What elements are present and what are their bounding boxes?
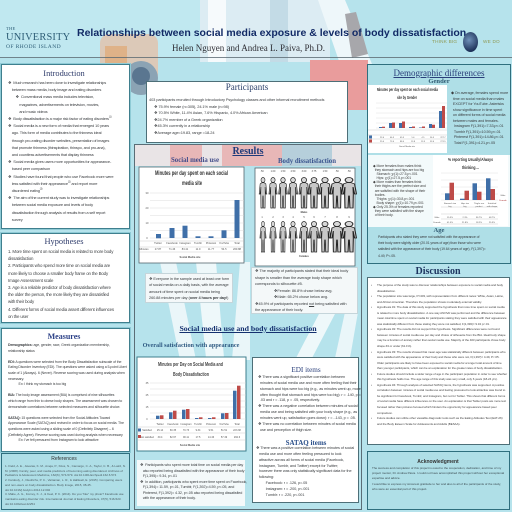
text: measures description: Appearance Scale (SATAQ) and revised in order to focus on social media. The (8, 421, 124, 425)
callout: body dissatisfaction findings: the appearance of their body. (255, 307, 303, 312)
bar chart: minutes per day by gender: 13.8 (411, 141, 416, 143)
callout: body dissatisfaction findings: ❖45.9% of participants reported not being satisfied with (255, 300, 346, 306)
bar chart: minutes per day by body dissatisfaction: 9.51 (209, 429, 214, 432)
text: EDI findings: .03 and r = .118, p = .05, respectively. (260, 398, 320, 402)
text: references list: 2. Fardouly, J., Diedrichs, P. C., Vartanian, L. R., & Halliwell, E. (2015). Comparing users and non-users on body dissatisfaction. Body Image, 2015, 38-45. doi:10.1016/j.bodyim.2014.12.002 (5, 478, 122, 492)
text: discussion bullets: Future studies can utilize other viewable diagnostic tools such as the Eating Attitudes Test (EAT-26) and the Body Esteem Scale for Adolescents and Adults (BESAA). (377, 416, 503, 426)
text: participant demographics: 403 participants recruited through Introductory Psychology classes and other informal recruitment methods (149, 97, 324, 102)
text: acknowledgment: The success and completion of this project is owed to the cooperation, dedication, and time of my project mentor, Dr. Andrea Paiva. I could not have accomplished this project without her exceptional expertise and advice. (372, 466, 504, 480)
text: body part findings: ◆ Only 25.3% of females reported (373, 205, 423, 209)
callout: social media use and dissatisfaction findings: with the appearance of their body. (143, 496, 196, 500)
text: SATAQ findings: Instagram, Tumblr, and Twitter) except for Twitter; (259, 464, 338, 468)
text: introduction bullets: through pro-eating disorder websites, presentation of images (12, 138, 109, 143)
bar chart: minutes per day by body dissatisfaction: 17.5 (196, 436, 201, 439)
heading: body dissatisfaction: Body dissatisfaction (278, 158, 336, 165)
text: age findings: their body were slightly older (20.01 years of age) than those who were (378, 241, 481, 245)
text: introduction bullets: between social media exposure and levels of body (12, 202, 93, 207)
text: SATAQ findings: Facebook: r = .126, p=.05 (266, 481, 307, 485)
heading: overall satisfaction with appearance: Overall satisfaction with appearance (143, 342, 239, 349)
bar chart: minutes per day on each social media site: 20 (146, 206, 149, 210)
bar chart: percent reporting usually or always thinking: 25.3% (489, 222, 495, 224)
heading: SATAQ items: SATAQ items (286, 439, 326, 447)
text: measures description: SATAQ: 15 questions were selected from the Social Attitudes Toward (8, 416, 110, 420)
text: discussion bullets: The purpose of the study was to discover relationships between exposure to social media and body dissatisfaction. (377, 283, 503, 293)
panel: measures (1, 328, 130, 452)
text: body part findings: are satisfied with the shape of their (375, 189, 425, 193)
callout: social media use and dissatisfaction findings (137, 460, 245, 506)
callout: social media use findings: amount of time spent on social media being (149, 289, 220, 294)
bar chart: minutes per day by body dissatisfaction: Total (234, 423, 240, 426)
callout: social media use findings: ❖ Everyone in the sample used at least one form (149, 276, 229, 281)
text: introduction bullets: disordered eating(3) (12, 188, 42, 193)
bar chart: minutes per day by gender: 4.5 (422, 137, 425, 139)
heading: hypotheses: Hypotheses (44, 237, 84, 246)
text: hypotheses list: more likely to choose a smaller body frame on the Body (8, 271, 108, 276)
bar chart: minutes per day on each social media site: 30 (146, 191, 149, 195)
text: gender findings: time on social media than males (453, 96, 504, 100)
text: introduction bullets: that promote thinness (thinspiration, thinspo, and pro-ana), (12, 145, 105, 150)
text: discussion bullets: Hypothesis #2: The results did not support this hypothesis. Significant differences were not found between minutes of social media use per day and choice of silhouette from the BIA. Ideal body shape may be a function of anxiety rather than social media use. Majority of the 403 participants chose body shape #4 or under (61.1%). (377, 327, 505, 348)
bar chart: percent reporting usually or always thinking: thinking… (462, 165, 479, 170)
bar chart: minutes per day on each social media site: Total (234, 241, 240, 245)
text: introduction bullets: ❖ Social media is a new form of media that emerged 10 years (8, 123, 109, 128)
bar chart: minutes per day on each social media site: YouTube (219, 241, 230, 245)
bar chart: minutes per day by body dissatisfaction: Body Dissatisfaction (173, 372, 209, 378)
bar chart: percent reporting usually or always thinking: perfect (476, 205, 483, 208)
heading: gender: Gender (428, 78, 450, 85)
bar chart: minutes per day by body dissatisfaction: 82.67 (170, 436, 177, 439)
text: body part findings: ◆ More males than females think (373, 180, 421, 184)
callout: body dissatisfaction findings (251, 267, 358, 314)
bar chart: percent reporting usually or always thinking: big (449, 206, 452, 208)
text: EDI findings: minutes went up, satisfaction goes down): r = -.143, p = .05. (260, 416, 356, 420)
bar chart: minutes per day by gender: site by Gender (397, 95, 417, 100)
text: EDI findings: minutes of social media use and more often feeling that their (260, 381, 357, 385)
figure: body image silhouettes: 3.00 (302, 170, 307, 173)
text: discussion bullets: Future studies should include a wider range of age in the participant population in order to see whether this hypothesis holds true. The age range of this study was very small, only 6 years (18-24 yrs). (377, 372, 507, 381)
callout: social media use findings (145, 273, 233, 303)
text: measures description: questions were asked using a sliding scale of 0 (Definitely Disagree) – 6 (8, 427, 114, 431)
figure: body image silhouettes: 5 (303, 216, 305, 219)
text: introduction bullets: ago. This form of media contributes to the thinness ideal (12, 130, 101, 135)
bar chart: minutes per day by body dissatisfaction: 25.14 (157, 429, 164, 432)
figure: body image silhouettes: .50 (260, 170, 264, 173)
panel: gender thinking findings (368, 155, 510, 227)
bar chart: minutes per day by gender: Social Media site (399, 145, 416, 148)
figure: body image silhouettes: 3.75 (312, 170, 317, 173)
heading: demographic differences: Demographic differences (393, 68, 485, 78)
text: discussion bullets: Hypothesis #4: Through analysis of selected SATAQ items, the hypothesis was supported. A positive correlation between minutes of social media use and feeling pressured to look attractive was found to be significant for Facebook, Tumblr, and Instagram, but not for Twitter. This shows that different forms of social media have different influences on the user. An explanation is that Twitter posts are more text focused rather than pictures focused which hinders the opportunity for appearance based peer comparison. (377, 383, 506, 415)
bar chart: minutes per day by body dissatisfaction: 90.11 (183, 436, 190, 439)
figure: body image silhouettes: .50 (347, 170, 351, 173)
bar chart: minutes per day by body dissatisfaction: Not satisfied (140, 436, 154, 439)
callout: body dissatisfaction findings: ❖Male: 65.2% chose below avg. (274, 294, 328, 299)
text: SATAQ findings: media use and more often feeling pressured to look (259, 452, 342, 456)
text: body part findings: Body shape: χ²(1)=10.79,p<.001 (376, 201, 424, 205)
text: body part findings: of their body. (375, 213, 393, 217)
text: gender findings: Total F(1,391)=4.21,p<.05 (454, 140, 495, 144)
text: SATAQ findings (256, 446, 354, 497)
title: Relationships between social media exposure & levels of body dissatisfaction (77, 27, 466, 39)
text: hypotheses list (8, 249, 114, 319)
figure: body image silhouettes: 9 (348, 216, 350, 219)
bar chart: percent reporting usually or always thinking: 41.5% (447, 222, 453, 224)
bar chart: minutes per day by gender: Minutes per day spent on each social media (377, 87, 438, 92)
text: EDI findings: often thought that stomach and hips were too big): r = .140, p = (260, 393, 361, 397)
text: gender findings: Pinterest F(1,391)=14.86,p<.01 (454, 135, 504, 139)
text: introduction bullets: ❖ Body dissatisfaction is a major risk factor of eating disorders(1) (8, 116, 111, 121)
heading: introduction: Introduction (43, 69, 85, 78)
heading: social media use and body dissatisfaction: Social media use and body dissatisfaction (179, 324, 317, 333)
bar chart: minutes per day by body dissatisfaction: 15 (146, 406, 149, 409)
text: introduction bullets: less satisfied with their appearance(2) and report more (12, 181, 97, 186)
text: EDI findings: ❖ There was a significant positive correlation between (258, 375, 345, 379)
bar chart: percent reporting usually or always thinking: 36.7% (476, 217, 482, 219)
text: body part findings: bodies. (375, 193, 385, 197)
text: measures description: Demographics: age, gender, race, Greek organization membership, (8, 343, 110, 347)
text: gender findings: between males and females. (453, 118, 499, 122)
bar chart: minutes per day by body dissatisfaction: Minutes per Day on Social Media and (158, 362, 223, 368)
figure: body image silhouettes: 4 (292, 216, 294, 219)
text: hypotheses list: the older the person, the more likely they are dissatisfied (8, 292, 109, 297)
text: introduction bullets: and music videos (19, 109, 47, 114)
bar chart: minutes per day by gender: 29.4 (380, 141, 385, 143)
text: measures description: BIA: The body image assessment (BIA) is comprised of nine silhouettes (8, 393, 114, 397)
bar chart: minutes per day by body dissatisfaction: 25 (146, 394, 149, 397)
bar chart: minutes per day by body dissatisfaction: Instagram (180, 423, 192, 426)
callout: social media use and dissatisfaction findings: ❖ In addition, participants who spent more time spent on Facebook, (140, 480, 247, 484)
text: hypotheses list: 3. Age is a reliable predictor of body dissatisfaction where (8, 285, 111, 290)
text: EDI findings (258, 375, 361, 432)
bar chart: minutes per day on each social media site: Minutes per day spent on each social (155, 171, 228, 177)
text: measures description: Ex: I think my stomach is too big (19, 382, 66, 386)
bar chart: minutes per day by gender: 69.9 (400, 137, 405, 139)
bar chart: percent reporting usually or always thinking: Female (433, 222, 441, 224)
bar chart: minutes per day by gender: 23.6 (380, 137, 385, 139)
figure: body image silhouettes: 1 (261, 216, 263, 219)
logo: Think Big We Do (432, 32, 500, 52)
text: introduction bullets: based peer comparison (12, 166, 50, 171)
text: body part findings: Hips: χ²(1)=27.5,p<.001 (376, 176, 411, 180)
bar chart: minutes per day on each social media site: 71.46 (169, 247, 176, 251)
figure: body image silhouettes: 7 (324, 216, 326, 219)
text: hypotheses list: 4. Different forms of social media assert different influences (8, 307, 114, 312)
text: participant demographics: ❖45.3% currently in a relationship (154, 123, 210, 128)
heading: measures: Measures (48, 332, 80, 341)
text: body part findings (373, 164, 426, 217)
bar chart: minutes per day on each social media site: Social Media site (180, 255, 201, 259)
text: measures description: scale of 1 (Always)- 6 (Never). Reverse scoring was used during analysis when (8, 371, 125, 375)
text: references list: 1. Field, A. E., Javaras, K. M., Aneja, P., Kitos, N., Camargo, C. A., Taylor, C. B., & Laird, N. M. (2008). Family, peer, and media predictors of becoming eating disordered. Archives of Pediatrics & Adolescent Medicine, 162(6), 574-579. doi:10.1001/archpedi.162.6.574 (5, 464, 126, 477)
callout: body dissatisfaction findings: ❖Female: 86.8% chose below avg. (274, 288, 332, 292)
heading: discussion: Discussion (415, 266, 461, 277)
figure: body image silhouettes: Females (299, 255, 309, 258)
bar chart: minutes per day by body dissatisfaction: 51.51 (221, 429, 228, 432)
callout: body dissatisfaction findings: shape is smaller than the average body shape which (255, 274, 342, 280)
panel: introduction (1, 64, 130, 229)
bar chart: percent reporting usually or always thinking: % reporting Usually/Always (448, 157, 493, 162)
text: references list: 3. Mabe, A. G., Forney, K. J., & Keel, P. K. (2014). Do you "like" my photo? Facebook use maintains eating disorder risk. International Journal of Eating Disorders, 47(5), 516-523. doi:10.1002/eat.22254 (5, 492, 124, 506)
text: introduction bullets: ❖ Much research has been done to investigate relationships (8, 80, 106, 85)
heading: age: Age (434, 227, 444, 234)
heading: EDI items: EDI items (291, 366, 321, 374)
panel: results frame (134, 144, 362, 510)
figure: body image silhouettes: 1.50 (323, 170, 328, 173)
bar chart: minutes per day by body dissatisfaction: Social Media site (180, 444, 201, 447)
callout: social media use and dissatisfaction findings: F(1,394)= 11.59, p<.01, Tumblr, F(1,392)=4.59, p<.05, and (143, 485, 234, 489)
bar chart: minutes per day by gender: 88.0 (400, 141, 405, 143)
bar chart: minutes per day by body dissatisfaction: 14.46 (208, 436, 215, 439)
text: hypotheses list: dissatisfaction (8, 256, 33, 261)
text: introduction bullets: dissatisfaction through analysis of results from a self report (12, 210, 105, 215)
heading: references: References (51, 456, 77, 462)
callout: body dissatisfaction findings: ❖ The majority of participants stated that their ideal body (255, 268, 348, 273)
heading: social media use: Social media use (171, 157, 219, 164)
bar chart: minutes per day by body dissatisfaction: Pinterest (206, 423, 216, 426)
bar chart: minutes per day by body dissatisfaction: 60.35 (170, 429, 177, 432)
text: measures description: Ex: I've felt pressured from Instagram to look attractive (19, 438, 98, 442)
text: measures description: EDI: A questions were selected from the Body Dissatisfaction subscale of the (8, 360, 121, 364)
text: age findings: Participants who stated they were not satisfied with the appearance of (378, 235, 479, 239)
figure: body image silhouettes: 6 (313, 216, 315, 219)
text: SATAQ findings: attractive across all forms of social media (Facebook, (259, 458, 344, 462)
logo: Think Big We Do: THINK BIG (432, 39, 457, 44)
bar chart: minutes per day on each social media site: 0 (146, 236, 148, 240)
bar chart: minutes per day by body dissatisfaction: 35 (146, 382, 149, 385)
bar chart: percent reporting usually or always thinking: 18.2% (476, 222, 482, 224)
bar chart: minutes per day on each social media site: Minutes (139, 247, 149, 251)
text: EDI findings: use and perception of thigh size. (260, 428, 312, 432)
bar chart: minutes per day on each social media site: Twitter (154, 241, 162, 245)
bar chart: percent reporting usually or always thinking: Female (499, 200, 507, 202)
bar chart: minutes per day by body dissatisfaction: 57.49 (221, 436, 228, 439)
heading: acknowledgment: Acknowledgment (417, 459, 459, 465)
bar chart: minutes per day by body dissatisfaction: 70.73 (183, 429, 190, 432)
figure: body image silhouettes: Males (301, 211, 308, 214)
bar chart: percent reporting usually or always thinking: big (464, 206, 467, 208)
heading: results: Results (232, 146, 264, 157)
text: SATAQ findings: Tumblr: r = .220, p<.001 (266, 493, 304, 497)
text: SATAQ findings: following: (259, 475, 274, 479)
bar chart: minutes per day by body dissatisfaction: YouTube (219, 423, 230, 426)
figure: body image silhouettes: 1.00 (271, 170, 276, 173)
callout: social media use and dissatisfaction findings: Pinterest, F(1,392)= 4.32, p<.05 also reported being dissatisfied (143, 491, 242, 495)
bar chart: minutes per day on each social media site: Tumblr (194, 241, 202, 245)
bar chart: percent reporting usually or always thinking: Stomach too (444, 202, 457, 205)
bar chart: minutes per day on each social media site: 11.9 (196, 247, 201, 251)
text: discussion bullets: Hypothesis #3: The results showed that mean age was statistically different between participants who were satisfied with the appearance of their body and those who were not, F(1,397)= 4.49, P<.05. Older participants are likely to have been exposed to social media for a longer total amount of time than younger participants, which can be an explanation for the greater rates of body dissatisfaction. (377, 350, 505, 370)
bar chart: percent reporting usually or always thinking: 2.3% (462, 217, 468, 219)
bar chart: minutes per day by body dissatisfaction: 30.4 (158, 436, 163, 439)
bar chart: minutes per day by gender: 227.7 (440, 137, 446, 139)
text: body part findings: Stomach: χ²(1)=27.5,p<.001 (376, 172, 418, 176)
text: participant demographics (149, 97, 324, 135)
text: discussion bullets: Hypothesis #1: The data of this study supported the hypothesis that more time spent on social media is related to more body dissatisfaction. A one way ANOVA was performed and the difference between mean total time spent on social media for participants stating they were satisfied with their appearance was statistically different from those stating they were not satisfied, F(1,393)= 9.34 p<.01. (377, 305, 506, 326)
text: measures description: demonstrate correlations between selected measures and silhouette choice. (8, 405, 120, 409)
text: gender findings: ◆ On average, females spend more (451, 91, 508, 95)
panel: references (1, 453, 130, 510)
bar chart: minutes per day by body dissatisfaction: Facebook (168, 423, 179, 426)
text: hypotheses list: Image Assessment scale (8, 278, 53, 283)
bar chart: minutes per day by gender: 53.6 (430, 141, 435, 143)
bar chart: minutes per day by gender: 56.9 (430, 137, 435, 139)
text: gender findings: Tumblr F(1,391)=10.59,p<.01 (454, 130, 501, 134)
text: introduction bullets: ❖ The aim of the current study was to investigate relationships (8, 195, 109, 200)
figure: body image silhouettes: 8 (336, 216, 338, 219)
figure: body image silhouettes: .50 (335, 170, 339, 173)
text: introduction bullets: and countless advertisements that display thinness (12, 152, 94, 157)
logo: Think Big We Do: WE DO (483, 39, 500, 44)
bar chart: minutes per day on each social media site: media site (182, 181, 202, 187)
panel: discussion (367, 277, 510, 445)
panel: participants (146, 81, 348, 143)
text: SATAQ findings: Instagram: r = .200, p<.001 (266, 487, 309, 491)
text: EDI findings: ❖ There was no correlation between minutes of social media (258, 422, 356, 426)
bar chart: minutes per day by body dissatisfaction: 0 (146, 418, 148, 421)
panel: demographic differences (367, 64, 511, 264)
figure: body image silhouettes: 1.50 (281, 170, 286, 173)
text: body part findings: their thighs are the perfect size and (375, 184, 426, 188)
text: age findings: 4.49, P<.05. (378, 254, 396, 258)
bar chart: minutes per day by body dissatisfaction: 9.34 (196, 429, 201, 432)
text: body part findings: Thighs: χ²(1)=30.8,p<.001 (376, 197, 414, 201)
text: age findings (378, 235, 486, 258)
bar chart: percent reporting usually or always thinking: Male (501, 195, 506, 197)
bar chart: minutes per day on each social media site: 83.41 (182, 247, 189, 251)
text: acknowledgment (372, 466, 504, 491)
text: introduction bullets: ❖ Studies have found that people who use Facebook more were (8, 174, 113, 179)
bar chart: minutes per day by gender: 66.3 (390, 137, 395, 139)
figure: body image silhouettes: 2 (272, 216, 274, 219)
panel: acknowledgment (367, 451, 510, 510)
text: participant demographics: ❖Average age=19.83, range =18-24 (154, 130, 214, 134)
bar chart: minutes per day on each social media site: Facebook (166, 241, 178, 245)
callout: body dissatisfaction findings: corresponds to silhouette #5. (255, 281, 303, 286)
bar chart: minutes per day by gender: 13.9 (421, 141, 426, 143)
text: gender findings: on different forms of social media (453, 113, 505, 117)
bar chart: minutes per day on each social media site: 27.87 (155, 247, 162, 251)
text: acknowledgment: I would like to express my sincerest gratitude to her and also to all of the participants of the study, who were an essential part of this project. (372, 482, 501, 491)
bar chart: minutes per day by gender: 5.6 (412, 137, 415, 139)
callout: social media use and dissatisfaction findings: ❖ Participants who spent more total time on social media per day (140, 463, 243, 467)
logo: University of Rhode Island: UNIVERSITY (6, 32, 70, 43)
text: hypotheses list: on the user (8, 314, 28, 319)
text: gender findings: show significance in time spent (453, 108, 502, 112)
logo: University of Rhode Island: OF RHODE ISLAND (6, 44, 61, 50)
logo: University of Rhode Island (6, 26, 70, 50)
text: age findings: satisfied with the appearance of their body (19.64 years of age), F(1,397)= (378, 247, 486, 251)
text: gender findings: EXCEPT for YouTube. Asterisks (453, 102, 504, 106)
text: measures description: which range from thin to obese body shapes. The assessment was chosen to (8, 399, 122, 403)
bar chart: percent reporting usually or always thinking: Thighs are (474, 202, 485, 205)
text: discussion bullets (371, 283, 508, 426)
bar chart: percent reporting usually or always thinking: Satisfied (488, 202, 497, 205)
text: introduction bullets (8, 80, 114, 222)
text: introduction bullets: survey (12, 217, 23, 222)
text: EDI findings: media use and being satisfied with your body shape (e.g., as (260, 410, 357, 414)
text: hypotheses list: with their body (8, 299, 34, 304)
bar chart: minutes per day on each social media site: Pinterest (206, 241, 216, 245)
bar chart: minutes per day on each social media site: 260.88 (233, 247, 242, 251)
text: gender findings (451, 91, 508, 145)
text: discussion bullets: The population size was large, P=403, with representation from different races: White, Asian, Latino, and African American. Therefore the population shows moderately external validity. (377, 294, 504, 304)
bar chart: percent reporting usually or always thinking: Hips too (461, 202, 470, 205)
text: introduction bullets: ❖ Social media gives users more opportunities for appearance- (8, 159, 111, 164)
callout: social media use and dissatisfaction findings: also reported being dissatisfied with the appearance of their body (143, 469, 244, 473)
callout: social media use findings: 260.88 minutes per day (over 4 hours per day!) (149, 295, 228, 300)
text: measures description: (Definitely Agree). Reverse scoring was used during analysis when necessary (8, 432, 123, 436)
text: body part findings: they were satisfied with the shape (375, 209, 424, 213)
bar chart: percent reporting usually or always thinking: with shape (487, 205, 498, 208)
text: SATAQ findings: however there was only statistically significant data for the (259, 469, 352, 473)
text: participant demographics: ❖24.7% member of a Greek organization (154, 116, 223, 122)
text: measures description: necessary. (8, 377, 24, 381)
text: measures description: Eating Disorder Inventory (EDI). The questions were asked using a 5-point Likert (8, 365, 127, 369)
text: introduction bullets: between mass media, body image and eating disorders (12, 87, 101, 92)
authors: Helen Nguyen and Andrea L. Paiva, Ph.D. (172, 43, 325, 53)
bar chart: minutes per day by body dissatisfaction: Twitter (156, 423, 164, 426)
bar chart: minutes per day by gender: 271.5 (440, 141, 446, 143)
bar chart: minutes per day on each social media site: 54.5 (221, 247, 227, 251)
panel: hypotheses (1, 233, 130, 323)
bar chart: percent reporting usually or always thinking: Male (435, 217, 440, 219)
bar chart: minutes per day by body dissatisfaction: 223.38 (233, 429, 241, 432)
text: references list (5, 464, 126, 506)
figure: body image silhouettes: 2.50 (291, 170, 296, 173)
text: participant demographics: ❖ 70.5% White, 11.4% Asian, 7.6% Hispanic, 4.0% African American (154, 110, 267, 115)
text: introduction bullets: ❖ Conventional mass media includes television, (16, 94, 94, 99)
bar chart: percent reporting usually or always thinking: 15.3% (447, 217, 453, 219)
panel: EDI and SATAQ items (252, 357, 359, 503)
bar chart: percent reporting usually or always thinking: 48.7% (489, 217, 495, 219)
bar chart: minutes per day by body dissatisfaction: 292.6 (234, 436, 241, 439)
heading: participants: Participants (226, 82, 268, 92)
text: body part findings: ◆ More females than males think (373, 164, 421, 168)
bar chart: minutes per day by body dissatisfaction: Tumblr (194, 423, 202, 426)
bar chart: minutes per day on each social media site: 10 (146, 221, 149, 225)
text: measures description: relationship status (8, 349, 35, 353)
bar chart: minutes per day by body dissatisfaction: Satisfied (142, 429, 152, 432)
text: participant demographics: ❖ 75.9% female (n=305), 24.1% male (n=98) (154, 104, 229, 108)
text: hypotheses list: 2. Participants who spend more time on social media are (8, 263, 110, 268)
text: introduction bullets: magazines, advertisements on television, movies, (19, 102, 99, 107)
text: gender findings: Instagram F(1,391)=7.33,p<.01 (454, 124, 504, 128)
text: SATAQ findings: ❖ There was a positive correlation between minutes of social (256, 446, 354, 450)
callout: social media use findings: of social media on a daily basis, with the average (149, 282, 229, 287)
text: EDI findings: stomach and hips were too big (e.g., as minutes went up, more (260, 387, 361, 391)
bar chart: percent reporting usually or always thinking: 21.8% (462, 222, 468, 224)
text: measures description (8, 343, 127, 442)
bar chart: minutes per day on each social media site: Instagram (179, 241, 191, 245)
bar chart: minutes per day by gender: 73.4 (390, 141, 395, 143)
figure: body image silhouettes: 3 (282, 216, 284, 219)
bar chart: minutes per day on each social media site: 11.77 (208, 247, 215, 251)
text: hypotheses list: 1. More time spent on social media is related to more body (8, 249, 113, 254)
logo: University of Rhode Island: THE (6, 26, 16, 31)
text: body part findings: they stomach and hips are too big (375, 168, 424, 172)
callout: social media use and dissatisfaction findings: F(1,395)= 9.34, p<.01 (143, 474, 177, 478)
text: EDI findings: ❖ There was a negative correlation between minutes of social (258, 404, 357, 408)
